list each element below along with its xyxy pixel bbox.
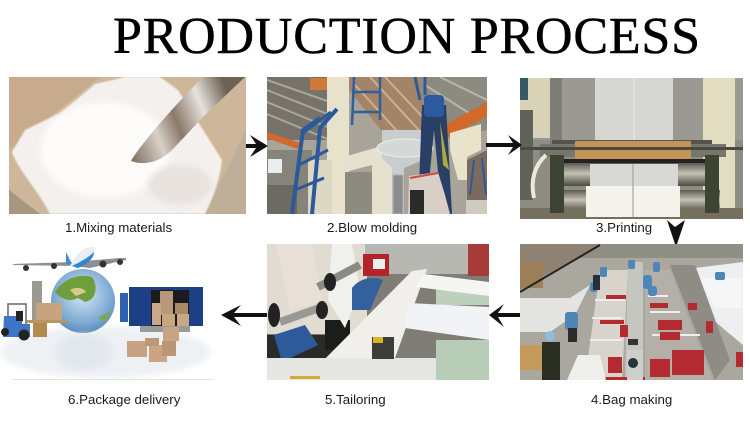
metal scoop <box>131 77 245 163</box>
arrow: step 5 to 6 <box>221 305 267 326</box>
cream column <box>327 77 349 214</box>
title: PRODUCTION PROCESS <box>113 8 700 65</box>
blue ladder <box>292 77 380 214</box>
pile of white granules <box>12 77 222 214</box>
middle rollers <box>560 163 708 186</box>
film bubble <box>382 130 421 214</box>
blue motors <box>274 325 318 358</box>
panel: mixing materials photo <box>9 77 246 214</box>
rollers <box>318 265 360 287</box>
label: step 2: 2.Blow molding <box>327 220 417 235</box>
arrow: step 1 to 2 <box>246 135 268 157</box>
white film <box>586 186 680 217</box>
panel: blow molding photo <box>267 77 487 214</box>
globe <box>51 269 115 333</box>
airplane <box>12 247 126 271</box>
globe reflection <box>54 334 114 370</box>
red and white equipment <box>408 172 450 214</box>
white film strips <box>416 274 489 296</box>
arrow: step 3 to 4 <box>667 220 685 244</box>
label: step 4: 4.Bag making <box>591 392 672 407</box>
arrow: step 4 to 5 <box>489 304 520 327</box>
panel: tailoring photo <box>267 244 489 380</box>
label: step 1: 1.Mixing materials <box>65 220 172 235</box>
panel: bag making photo <box>520 244 743 380</box>
film sheet <box>595 78 673 140</box>
label: step 5: 5.Tailoring <box>325 392 386 407</box>
cream panel right <box>450 124 481 180</box>
cardboard boxes <box>127 327 179 362</box>
white table <box>326 269 427 358</box>
film loop left <box>276 244 322 312</box>
forklift <box>1 281 68 340</box>
label: step 6: 6.Package delivery <box>68 392 181 407</box>
panel: printing photo <box>520 78 743 219</box>
label: step 3: 3.Printing <box>596 220 652 235</box>
panel: package delivery illustration <box>0 244 221 380</box>
cork roller <box>575 141 691 159</box>
arrow: step 2 to 3 <box>486 135 522 155</box>
tower with blue top <box>418 105 452 214</box>
machine rows <box>588 270 628 377</box>
workers <box>565 260 725 330</box>
truck <box>120 287 203 332</box>
